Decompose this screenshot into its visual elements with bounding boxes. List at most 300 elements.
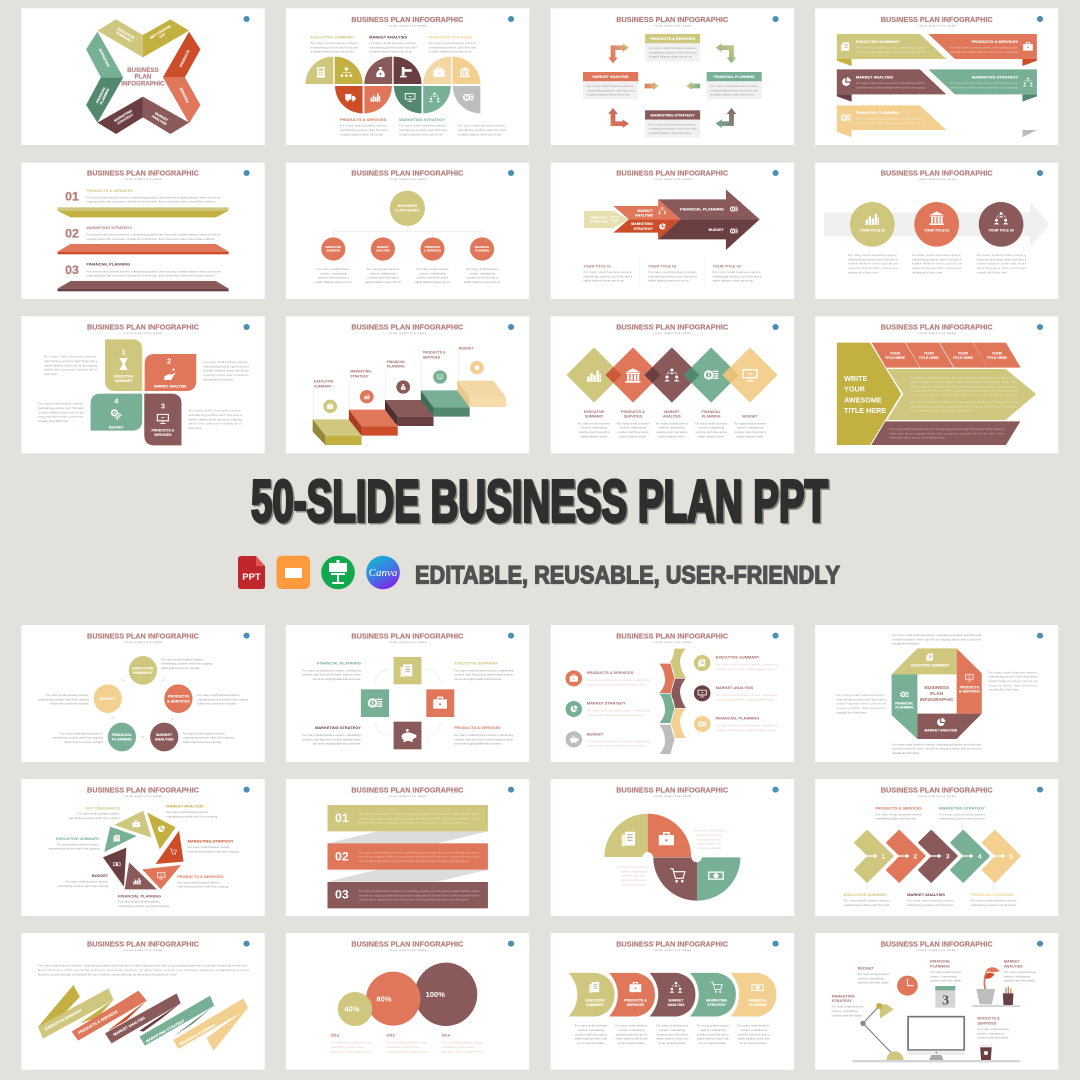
- circle captions: battle that consumes virtually: [50, 702, 89, 706]
- paragraphs: their time.: [189, 426, 203, 430]
- main arrow body: balance sheet can be an ongoing battle that consumes virtually all of their time.: [911, 380, 1018, 384]
- text blocks bottom: PRODUCTS & SERVICES: [340, 118, 387, 122]
- circle captions: maintaining positive cash flow ongoing: [161, 662, 213, 666]
- panel: slide 23 curved segments: BUSINESS PLAN INFOGRAPHIC: [616, 940, 729, 949]
- item 03: ongoing battle that consumes virtually all of their time. Even retirement often seems like a distant: [86, 274, 215, 278]
- segment text: For many small business: [575, 1024, 607, 1028]
- panel: slide 7 big arrow: BUSINESS PLAN INFOGRAPHIC: [616, 169, 729, 178]
- diamond labels: [584, 410, 759, 419]
- paragraphs: maintaining positive cash flow and a: [44, 359, 98, 363]
- text columns: For many small business owners,: [848, 253, 898, 257]
- segment icons and labels: SERVICES: [627, 1003, 645, 1007]
- main title: [251, 468, 830, 536]
- diamond text: positive cash flow and a: [617, 430, 649, 434]
- side text: For many small business owners,: [988, 670, 1038, 674]
- slides row 3, right half: [551, 316, 1058, 453]
- captions: For many small business owners, maintaining: [302, 733, 361, 737]
- banner: market analysis: [837, 69, 946, 102]
- bar 03: seems like a distant spot on the horizon, let alone plans to fund your business.: [359, 898, 469, 902]
- left items: [565, 670, 650, 748]
- segment text: positive cash flow and a: [657, 1032, 688, 1036]
- chart: octagon: INFOGRAPHIC: [920, 697, 954, 703]
- banner: executive summary: cash flow and a stable balance sheet can be an ongoing: [856, 50, 925, 54]
- text columns: For many small business owners,: [912, 253, 962, 257]
- panel: slide 15 zipper: YOUR SUBTITLE HERE: [653, 642, 692, 644]
- captions: maintaining positive cash flow and: [970, 903, 1016, 907]
- circle captions: maintaining positive cash flow ongoing: [197, 697, 249, 701]
- panel: slide 14 four squares: [286, 625, 529, 762]
- circle captions: battle that consumes virtually: [183, 740, 222, 744]
- paragraphs: battle that consumes virtually all of: [44, 368, 97, 372]
- chart: eight fold X shape: SUMMARY: [115, 31, 133, 43]
- circles: PLANNING: [112, 738, 132, 742]
- panel: slide 20 chevrons: BUSINESS PLAN INFOGRAPHIC: [881, 786, 993, 795]
- diamond text: positive cash flow and a: [696, 430, 727, 434]
- panel: slide 13 circle cycle: YOUR SUBTITLE HERE: [124, 642, 162, 644]
- captions: maintaining positive cash flow ongoing: [177, 885, 229, 889]
- year captions: flow and a stable balance sheet: [441, 1049, 483, 1053]
- side text: For many small business owners,: [836, 693, 886, 697]
- panel: slide 10 3D stairs: YOUR SUBTITLE HERE: [388, 333, 427, 335]
- text columns: [848, 253, 1027, 274]
- petal 2 market analysis: MARKET ANALYSIS: [154, 384, 187, 388]
- panel: slide 9 petals: YOUR SUBTITLE HERE: [124, 333, 162, 335]
- segment text: stable balance sheet can: [615, 1037, 648, 1041]
- segment text: positive cash flow and a: [575, 1032, 607, 1036]
- four title tabs: TITLE HERE: [987, 356, 1008, 360]
- left items: positive cash flow and a stable balance sheet: [587, 713, 646, 717]
- chart: octagon: EXECUTIVE SUMMARY: [911, 664, 950, 668]
- banner: financial planning: FINANCIAL PLANNING: [856, 111, 899, 115]
- chart: folded ribbons: EXECUTIVE SUMMARY: [44, 1008, 83, 1031]
- captions: For many small business owners,: [875, 812, 922, 816]
- box: financial planning: [707, 72, 762, 99]
- text columns: maintaining positive cash flow and a: [648, 274, 697, 278]
- step 3 financial planning: [385, 360, 434, 426]
- pink captions: For many small business: [693, 829, 725, 833]
- panel: slide 22 growing circles: YOUR SUBTITLE HERE: [388, 950, 427, 952]
- circles: four phases: FINANCIAL: [475, 246, 489, 249]
- text blocks top: FINANCIAL PLANNING: [429, 35, 472, 39]
- diamond text: positive cash flow and a: [735, 430, 766, 434]
- captions: maintaining positive cash flow ongoing: [188, 849, 239, 853]
- segment text: [575, 1024, 770, 1045]
- slides row 4 and 5, right half: [551, 625, 1058, 916]
- right items: EXECUTIVE SUMMARY: [716, 656, 760, 660]
- panel: slide 24 desk scene: BUSINESS PLAN INFOGRAPHIC: [881, 940, 993, 949]
- captions: positive cash flow and a stable balance sheet: [302, 673, 361, 677]
- panel: slide 8 circles on arrow: BUSINESS PLAN INFOGRAPHIC: [881, 169, 993, 178]
- bar 02: For many small business owners, maintaining positive cash flow and a stable balance sheet: [359, 850, 480, 854]
- panel: slide 9 petals: BUSINESS PLAN INFOGRAPHIC: [87, 323, 199, 332]
- body text: positive cash flow and a: [467, 276, 498, 280]
- banner: products and services: PRODUCTS & SERVICES: [971, 40, 1019, 44]
- side text: virtually all of their time.: [988, 688, 1020, 692]
- left items: For many small business owners, maintaining: [587, 709, 650, 713]
- chart: eight fold X shape: MARKETING: [98, 48, 111, 68]
- body text: stable balance sheet can be: [464, 280, 501, 284]
- pink captions: owners, maintaining: [696, 833, 722, 837]
- segment text: stable balance sheet can: [697, 1037, 729, 1041]
- segment icons and labels: PRODUCTS &: [624, 998, 647, 1002]
- captions: PLANNING: [930, 964, 950, 968]
- gray fold: [1022, 130, 1037, 137]
- captions: positive cash flow and a stable balance sheet: [454, 737, 514, 741]
- segment text: owners, maintaining: [619, 1028, 645, 1032]
- panel: slide 21 ribbons: YOUR SUBTITLE HERE: [124, 950, 162, 952]
- diamond labels: SUMMARY: [585, 415, 604, 419]
- box: market analysis: For many small business owners,: [587, 84, 635, 88]
- captions: BUDGET: [858, 966, 875, 970]
- left items: MARKET STRATEGY: [587, 702, 626, 706]
- petal 1 executive summary: [105, 339, 142, 391]
- circles: FINANCIAL: [112, 733, 133, 737]
- captions: MARKETING STRATEGY: [315, 726, 361, 730]
- chart: five curved segments: [568, 972, 777, 1017]
- four title tabs: TITLE HERE: [885, 356, 906, 360]
- side text: maintaining positive cash flow and a: [836, 697, 886, 701]
- bar 03: 03: [335, 888, 349, 902]
- arrow head block: WRITE: [844, 375, 868, 383]
- captions: positive cash flow stable.: [1004, 979, 1036, 983]
- chart: octagon: [892, 648, 982, 739]
- text blocks top: For many small business owners,: [369, 41, 417, 45]
- segment icons and labels: SUMMARY: [586, 1003, 605, 1007]
- captions: positive cash flow and a stable balance sheet: [454, 673, 514, 677]
- arrows and numbers: 1: [881, 854, 885, 861]
- body text: positive cash flow and a: [367, 276, 399, 280]
- captions: MARKET ANALYSIS: [166, 804, 204, 808]
- panel: slide 24 desk scene: YOUR SUBTITLE HERE: [918, 950, 956, 952]
- chart: overlapping circles: 100%: [426, 990, 445, 999]
- box: products and services: For many small business owners,: [649, 46, 697, 50]
- captions: For many small business: [930, 970, 962, 974]
- text columns: stable balance sheet can be an: [848, 262, 898, 266]
- panel: slide 5 numbered plates: BUSINESS PLAN INFOGRAPHIC: [87, 169, 199, 178]
- banner: marketing strategy: MARKETING STRATEGY: [972, 75, 1019, 79]
- captions: EXECUTIVE SUMMARY: [56, 837, 100, 841]
- text blocks bottom: For many small business owners,: [399, 124, 447, 128]
- body text: owners, maintaining: [320, 271, 347, 275]
- chart: layered arrow: STRATEGY: [634, 227, 654, 231]
- panel: slide 19 S curve: [551, 779, 794, 916]
- captions: positive cash flow and a stable balance sheet: [302, 737, 361, 741]
- item 03: [58, 263, 229, 291]
- circle 2: YOUR TITLE 02: [924, 229, 949, 233]
- pink captions: owners, maintaining: [621, 869, 647, 873]
- petal 3 products and services: 3: [161, 401, 165, 410]
- panel: slide 10 3D stairs: BUSINESS PLAN INFOGRAPHIC: [351, 323, 464, 332]
- year captions: flow and a stable balance sheet: [331, 1049, 372, 1053]
- circle 3: YOUR TITLE 03: [989, 229, 1014, 233]
- panel: slide 15 zipper: [551, 625, 794, 762]
- dividers: [640, 257, 705, 287]
- top text: virtually all of their time.: [892, 642, 920, 646]
- pink captions: positive cash flow: [622, 874, 646, 878]
- chart: seven triangles: [103, 811, 184, 889]
- side text: For many small business owners, maintaining positive cash flow and: [892, 742, 982, 746]
- illustration: calendar: [935, 986, 955, 1008]
- panel: slide 21 ribbons: BUSINESS PLAN INFOGRAPHIC: [87, 940, 199, 949]
- captions: For many small business owners,: [65, 880, 108, 884]
- circles: four phases: [321, 237, 494, 261]
- diamond labels: PLANNING: [702, 415, 721, 419]
- captions: owners, maintaining: [930, 974, 957, 978]
- banner: market analysis: cash flow and a stable balance sheet can be an ongoing: [856, 85, 925, 89]
- pink captions: ongoing battle that: [622, 878, 646, 882]
- paragraphs: their time.: [44, 372, 58, 376]
- segment text: positive cash flow and a: [738, 1032, 769, 1036]
- text columns: YOUR TITLE 01: [583, 264, 611, 268]
- text columns: stable balance sheet can be an: [977, 262, 1027, 266]
- panel: slide 7 big arrow: [551, 163, 794, 299]
- circle captions: battle that consumes virtually: [64, 740, 104, 744]
- diamond labels: MARKET: [664, 410, 680, 414]
- banner: executive summary: For many small business owners, maintaining positive: [856, 46, 925, 50]
- illustration: coffee cup: [980, 1045, 992, 1060]
- circle captions: maintaining positive cash flow ongoing: [183, 736, 234, 740]
- left items: positive cash flow and a stable balance sheet: [587, 682, 646, 686]
- captions: RODUCTS &: [977, 1017, 1000, 1021]
- circles: four phases: EXECUTIVE: [326, 246, 341, 249]
- chart: eight fold X shape: EXECUTIVE: [117, 27, 135, 40]
- panel: slide 24 desk scene: [815, 933, 1058, 1070]
- top text: [892, 633, 982, 646]
- text blocks top: a stable balance sheet can be an: [311, 50, 354, 54]
- diamond text: positive cash flow and a: [579, 430, 610, 434]
- segment icons and labels: MARKETING: [706, 998, 727, 1002]
- segment icons and labels: ANALYSIS: [668, 1003, 685, 1007]
- body text: For many small business: [367, 267, 399, 271]
- text blocks top: maintaining positive cash flow and: [369, 45, 417, 49]
- intro text: [38, 964, 249, 976]
- chart: layered arrow: MARKETING: [631, 222, 653, 226]
- captions: ANALYSIS: [1004, 964, 1023, 968]
- paragraphs: a stable balance sheet can be an: [203, 369, 249, 373]
- paragraphs: For many small business owners,: [203, 360, 249, 364]
- segment text: be an ongoing battle.: [740, 1041, 767, 1045]
- circle captions: For many small business owners,: [60, 731, 103, 735]
- top text: For many small business owners, maintaining positive cash flow and: [892, 633, 982, 637]
- chart: folded ribbons: MARKETING STRATEGY: [145, 1018, 186, 1044]
- icon: PPT file: [238, 556, 265, 589]
- circle captions: For many small business owners,: [46, 693, 89, 697]
- text blocks bottom: MARKETING STRATEGY: [399, 118, 445, 122]
- captions: MARKETING STRATEGY: [188, 840, 234, 844]
- item 02: For many small business owners, maintaining positive cash flow and a stable balance sheet can be an: [86, 233, 221, 237]
- petal 4 budget: 4: [114, 396, 119, 405]
- circle captions: battle that consumes virtually: [197, 702, 236, 706]
- illustration: pencil cup: [1003, 987, 1013, 1005]
- chart: eight fold X shape: STRATEGY: [116, 112, 135, 126]
- body text: For many small business: [416, 267, 449, 271]
- year captions: [331, 1033, 484, 1053]
- captions: EXECUTIVE SUMMARY: [844, 893, 888, 897]
- petal 1 executive summary: EXECUTIVE: [114, 374, 134, 378]
- arrows and numbers: 5: [1009, 854, 1013, 861]
- step 3 financial planning: FINANCIAL: [387, 360, 405, 364]
- year captions: maintaining positive cash: [331, 1045, 364, 1049]
- box: products and services: maintaining positive cash flow and: [649, 50, 697, 54]
- illustration: calendar: 3: [942, 993, 949, 1008]
- banner: financial planning: cash flow and a stable balance sheet can be an ongoing: [856, 121, 925, 125]
- paragraphs: virtually all of their time.: [203, 377, 234, 381]
- tagline: EDITABLE, REUSABLE, USER-FRIENDLY: [415, 562, 840, 590]
- panel: slide 12 fishbone arrow: YOUR SUBTITLE HERE: [918, 333, 956, 335]
- segment text: stable balance sheet can: [575, 1037, 608, 1041]
- step 1 executive summary: SUMMARY: [314, 384, 332, 388]
- captions: maintaining positive cash flow ongoing: [118, 904, 169, 908]
- bar 01: For many small business owners, maintaining positive cash flow and a stable balance sheet: [359, 812, 480, 816]
- box: marketing strategy: a stable balance sheet can be an: [649, 131, 692, 135]
- chart: eight fold X shape: SERVICES: [179, 87, 190, 104]
- body text: For many small business: [317, 267, 349, 271]
- banner: marketing strategy: [928, 69, 1037, 102]
- diamond labels: ANALYSIS: [663, 415, 681, 419]
- text columns: ongoing battle that consumes: [912, 266, 962, 270]
- pink captions: ongoing battle that: [697, 842, 721, 846]
- text blocks top: For many small business owners,: [429, 41, 476, 45]
- gray folds: [327, 831, 488, 882]
- panel: slide 14 four squares: BUSINESS PLAN INFOGRAPHIC: [351, 632, 464, 641]
- bar 01: can be an ongoing battle that consumes virtually all of their time. Even retirement often: [359, 816, 480, 820]
- panel: slide 20 chevrons: YOUR SUBTITLE HERE: [918, 796, 956, 798]
- step 5 budget: BUDGET: [459, 346, 474, 350]
- panel: slide 18 three bars: BUSINESS PLAN INFOGRAPHIC: [351, 786, 464, 795]
- banner: marketing strategy: cash flow and a stable balance sheet can be an ongoing: [949, 85, 1018, 89]
- chart: eight fold X shape: PLANNING: [99, 88, 111, 105]
- right items: For many small business owners, maintaining: [716, 693, 778, 697]
- step 4 products and services: SERVICES: [423, 355, 441, 359]
- intro text: business succession plan is beneficial for most business owners and can be absolutely necessary for some.: [38, 972, 178, 976]
- petal 3 products and services: PRODUCTS &: [152, 428, 175, 432]
- paragraphs: virtually all of their time.: [38, 419, 69, 423]
- icon: Canva: Canva: [369, 567, 398, 579]
- paragraphs: ongoing battle that consumes: [38, 415, 84, 419]
- body text: For many small business: [466, 267, 498, 271]
- banner: financial planning: For many small business owners, maintaining positive: [856, 117, 925, 121]
- captions: owners, maintaining: [858, 976, 884, 980]
- year captions: flow and a stable balance sheet: [386, 1049, 428, 1053]
- box: marketing strategy: maintaining positive cash flow and: [649, 127, 697, 131]
- panel: slide 22 growing circles: [286, 933, 529, 1070]
- chart: five diamonds: [567, 347, 778, 403]
- diamond text: stable balance sheet.: [619, 434, 647, 438]
- chart: overlapping circles: [338, 963, 477, 1026]
- text columns: stable balance sheet can be an: [648, 279, 689, 283]
- text blocks bottom: maintaining positive cash flow and: [399, 128, 447, 132]
- year captions: 2015: [386, 1033, 395, 1037]
- text blocks top: [311, 35, 477, 54]
- circles: MARKET: [156, 733, 173, 737]
- four title tabs: TITLE HERE: [953, 356, 974, 360]
- segment text: owners, maintaining: [741, 1028, 767, 1032]
- paragraphs: ongoing battle that consumes: [203, 373, 249, 377]
- circles: four phases: & SERVICES: [424, 248, 441, 252]
- captions: [844, 807, 1017, 907]
- text columns: maintaining positive cash flow and a: [912, 257, 962, 261]
- captions: EXECUTIVE SUMMARY: [454, 661, 498, 665]
- body text: owners, maintaining: [370, 271, 396, 275]
- side text: [836, 670, 1038, 755]
- chart: eight fold X shape: MARKETING: [113, 109, 133, 123]
- circle 3: [979, 202, 1023, 247]
- chart: layered arrow: PRODUCTS: [591, 216, 607, 220]
- diamond text: For many small business: [695, 421, 727, 425]
- captions: positive cash flow stable.: [977, 1036, 1009, 1040]
- chart: octagon: MARKET ANALYSIS: [925, 729, 958, 733]
- panel: slide 14 four squares: YOUR SUBTITLE HERE: [388, 642, 427, 644]
- circles: & SERVICES: [167, 699, 190, 703]
- diamond text: For many small business: [617, 421, 649, 425]
- chart: folded ribbons: [38, 985, 248, 1051]
- diamond text: owners, maintaining: [698, 426, 725, 430]
- main arrow body: For many small business owners, maintaining positive cash flow and a stable: [911, 376, 1018, 380]
- banner: products and services: For many small business owners, maintaining positive: [949, 46, 1018, 50]
- panel: slide 20 chevrons: [815, 779, 1058, 916]
- box: products and services: a stable balance sheet can be an: [649, 55, 692, 59]
- chart: layered arrow: MARKET: [638, 209, 654, 213]
- diamond text: stable balance sheet.: [736, 434, 764, 438]
- main arrow body: plan is beneficial for most business owners and can be absolutely necessary.: [911, 393, 1018, 397]
- chart: folded ribbons: FINANCIAL PLANNING: [179, 1023, 216, 1046]
- panel: slide 10 3D stairs: [286, 316, 529, 453]
- main arrow body: Even retirement often seems like a distant spot on the horizon, let alone plans: [911, 384, 1019, 388]
- circle captions: battle that consumes virtually: [161, 666, 200, 670]
- text columns: virtually all of their time.: [912, 270, 943, 274]
- paragraphs: [38, 355, 249, 430]
- step 1 executive summary: [313, 380, 362, 445]
- pink captions: consumes virtually: [622, 882, 646, 886]
- bar 02: can be an ongoing battle that consumes virtually all of their time. Even retirement often: [359, 855, 480, 859]
- cycle arcs: [375, 668, 441, 737]
- circle: business plan phases: [390, 191, 425, 226]
- box: products and services: [645, 34, 700, 61]
- paragraphs: maintaining positive cash flow and a: [189, 413, 242, 417]
- banner: marketing strategy: For many small business owners, maintaining positive: [949, 81, 1018, 85]
- panel: slide 8 circles on arrow: YOUR SUBTITLE HERE: [918, 179, 956, 181]
- segment text: owners, maintaining: [659, 1028, 686, 1032]
- diamond text: positive cash flow and a: [656, 430, 688, 434]
- petal 3 products and services: [144, 394, 181, 445]
- center title: INFOGRAPHIC: [121, 80, 165, 87]
- year captions: 2019: [441, 1033, 450, 1037]
- captions: For many small business owners,: [77, 812, 120, 816]
- panel: slide 6 org phases: [286, 163, 529, 299]
- four title tabs: YOUR: [958, 351, 968, 355]
- step 2 marketing strategy: [349, 370, 398, 436]
- panel: slide 21 ribbons: [21, 933, 265, 1070]
- year captions: For many small business owners,: [441, 1041, 484, 1045]
- arrows and numbers: 2: [913, 854, 917, 861]
- circle captions: For many small business owners,: [161, 657, 204, 661]
- captions: maintaining positive cash flow ongoing: [48, 847, 100, 851]
- captions: maintaining positive cash flow and: [939, 817, 985, 821]
- chart: layered arrow: [584, 189, 760, 250]
- body text: positive cash flow and a: [318, 276, 349, 280]
- segment text: positive cash flow and a: [616, 1032, 648, 1036]
- bar 03: [327, 882, 488, 908]
- arrows: [608, 43, 736, 128]
- slides row 1 and 2, right half: [551, 8, 1058, 299]
- panel: slide 13 circle cycle: [21, 625, 265, 762]
- captions: FINANCIAL PLANNING: [317, 661, 361, 665]
- captions: PRODUCTS & SERVICES: [454, 726, 501, 730]
- chart: eight fold X shape: ANALYSIS: [151, 114, 168, 127]
- paragraphs: stable balance sheet can be an ongoing: [189, 417, 242, 421]
- bar 03: can be an ongoing battle that consumes virtually all of their time. Even retirement often: [359, 893, 480, 897]
- diamond text: owners, maintaining: [620, 426, 646, 430]
